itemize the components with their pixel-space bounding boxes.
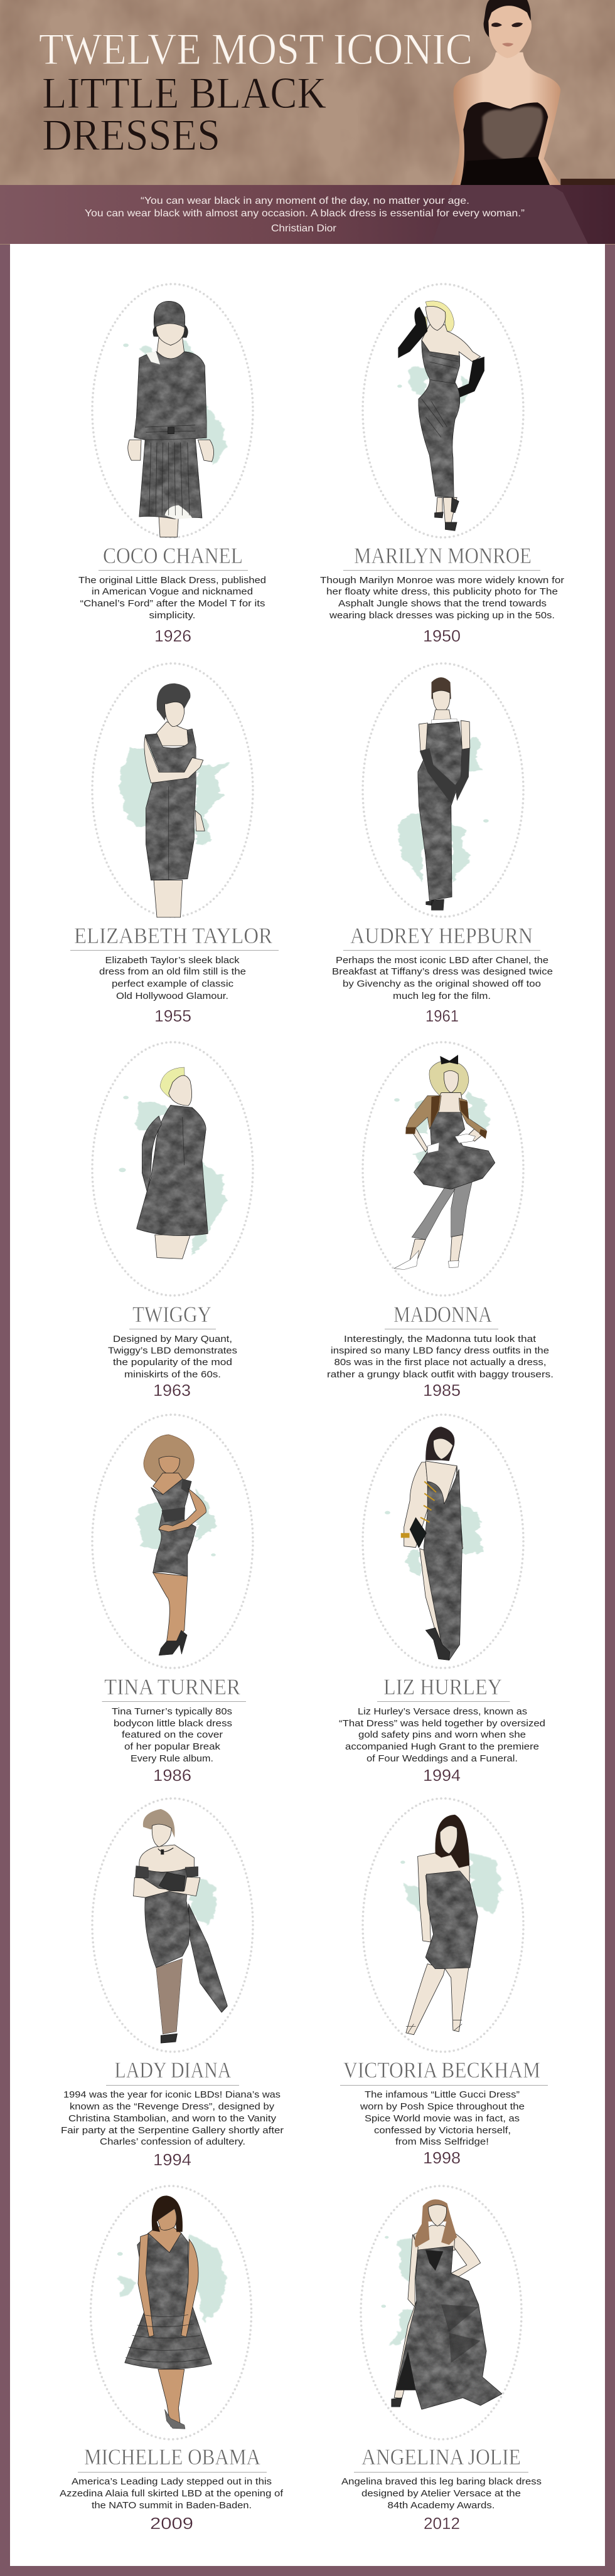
card: Marilyn Monroe <box>320 284 564 645</box>
description <box>112 1706 232 1764</box>
description: Perhaps the most iconic LBD after Chanel, the <box>336 955 548 966</box>
portrait frame <box>92 1042 253 1296</box>
description: 1994 was the year for iconic LBDs! Diana’s was <box>63 2089 281 2100</box>
description: Twiggy’s LBD demonstrates <box>108 1346 237 1356</box>
description: Fair party at the Serpentine Gallery shortly after <box>61 2125 284 2136</box>
description: Breakfast at Tiffany’s dress was designed twice <box>332 966 553 977</box>
card: Twiggy <box>92 1042 253 1400</box>
description: of her popular Break <box>124 1741 221 1752</box>
description: “Chanel’s Ford” after the Model T for its <box>80 598 265 609</box>
year: 1998 <box>423 2148 461 2167</box>
portrait frame <box>363 284 523 537</box>
year: 1994 <box>153 2150 191 2169</box>
portrait frame <box>361 2186 521 2439</box>
description: The original Little Black Dress, published <box>78 575 266 586</box>
description: Christina Stambolian, and worn to the Vanity <box>68 2113 277 2124</box>
description: gold safety pins and worn when she <box>358 1729 526 1740</box>
description: featured on the cover <box>122 1729 223 1740</box>
description: Tina Turner’s typically 80s <box>112 1706 232 1717</box>
figure: Elizabeth Taylor <box>120 684 232 917</box>
portrait frame <box>363 1042 523 1296</box>
name: MICHELLE OBAMA <box>84 2444 260 2469</box>
card: Tina Turner <box>92 1415 253 1785</box>
description: “That Dress” was held together by oversized <box>339 1718 545 1729</box>
description: 84th Academy Awards. <box>388 2500 495 2511</box>
description: perfect example of classic <box>112 978 234 990</box>
description <box>99 955 246 1001</box>
year: 1985 <box>423 1381 461 1400</box>
description: wearing black dresses was picking up in the 50s. <box>329 610 555 621</box>
card: Coco Chanel <box>78 284 266 645</box>
description: the NATO summit in Baden-Baden. <box>92 2500 252 2511</box>
card: Victoria Beckham <box>340 1798 548 2167</box>
figure: Liz Hurley <box>385 1427 484 1660</box>
figure: Marilyn Monroe <box>397 301 484 531</box>
description: Designed by Mary Quant, <box>113 1334 232 1344</box>
description <box>320 575 564 621</box>
description: Charles’ confession of adultery. <box>100 2136 245 2147</box>
description <box>78 575 266 621</box>
description <box>108 1334 237 1380</box>
description <box>61 2089 284 2147</box>
year: 1986 <box>153 1766 191 1785</box>
photo background wall <box>0 0 615 245</box>
figure: Angelina Jolie <box>382 2199 502 2409</box>
portrait frame <box>92 284 253 537</box>
description: simplicity. <box>149 610 196 621</box>
name: MADONNA <box>393 1302 492 1327</box>
description: bodycon little black dress <box>114 1718 232 1729</box>
description: in American Vogue and nicknamed <box>92 586 253 597</box>
description: Asphalt Jungle shows that the trend towards <box>338 598 547 609</box>
description <box>341 2476 542 2511</box>
portrait frame <box>92 663 253 917</box>
year: 1950 <box>423 626 461 645</box>
description: by Givenchy as the original showed off too <box>343 978 541 990</box>
description: America’s Leading Lady stepped out in this <box>72 2476 272 2487</box>
quote band <box>0 185 615 244</box>
title <box>39 25 473 160</box>
name: COCO CHANEL <box>103 543 243 568</box>
quote text <box>85 196 525 234</box>
portrait frame <box>90 2186 251 2439</box>
description: her floaty white dress, this publicity photo for The <box>326 586 558 597</box>
description: designed by Atelier Versace at the <box>361 2488 521 2499</box>
description: Old Hollywood Glamour. <box>116 991 228 1001</box>
description: Every Rule album. <box>131 1753 213 1764</box>
portrait frame <box>363 1415 523 1668</box>
quote text: You can wear black with almost any occasion. A black dress is essential for every woman.” <box>85 208 525 219</box>
title: LITTLE BLACK <box>42 69 326 118</box>
figure: Tina Turner <box>137 1435 218 1655</box>
description: Angelina braved this leg baring black dress <box>341 2476 542 2487</box>
year: 1963 <box>153 1381 191 1400</box>
name: AUDREY HEPBURN <box>350 923 533 948</box>
description: worn by Posh Spice throughout the <box>360 2101 525 2112</box>
figure: Audrey Hepburn <box>399 677 489 910</box>
photo: model in strapless black dress <box>450 0 615 188</box>
portrait frame <box>92 1798 253 2052</box>
description <box>360 2089 525 2147</box>
description: Liz Hurley’s Versace dress, known as <box>358 1706 527 1717</box>
card: Michelle Obama <box>60 2186 284 2533</box>
figure: Coco Chanel <box>123 301 226 537</box>
card: Madonna <box>327 1042 554 1400</box>
description: miniskirts of the 60s. <box>124 1370 221 1380</box>
figure: Victoria Beckham <box>400 1815 500 2035</box>
description <box>327 1334 554 1380</box>
portrait frame <box>363 663 523 917</box>
description: from Miss Selfridge! <box>395 2136 489 2147</box>
card: Angelina Jolie <box>341 2186 542 2533</box>
description: much leg for the film. <box>393 991 491 1001</box>
description: inspired so many LBD fancy dress outfits in the <box>331 1346 549 1356</box>
name: LADY DIANA <box>114 2057 231 2082</box>
name: ELIZABETH TAYLOR <box>74 923 272 948</box>
name: VICTORIA BECKHAM <box>343 2057 540 2082</box>
quote text: “You can wear black in any moment of the day, no matter your age. <box>141 196 469 206</box>
name: TINA TURNER <box>104 1674 240 1699</box>
description: The infamous “Little Gucci Dress” <box>365 2089 520 2100</box>
year: 1926 <box>154 626 191 645</box>
card: Lady Diana <box>61 1798 284 2169</box>
description <box>60 2476 284 2511</box>
description: dress from an old film still is the <box>99 966 246 977</box>
description: confessed by Victoria herself, <box>374 2125 511 2136</box>
year: 1961 <box>425 1006 459 1025</box>
year: 2012 <box>424 2514 460 2533</box>
description <box>332 955 553 1001</box>
card: Elizabeth Taylor <box>70 663 279 1025</box>
description: 80s was in the first place not actually a dress, <box>334 1357 546 1368</box>
header photo panel <box>0 0 615 245</box>
year: 1955 <box>154 1006 191 1025</box>
description: Spice World movie was in fact, as <box>365 2113 520 2124</box>
quote text: Christian Dior <box>271 223 337 234</box>
figure: Madonna <box>394 1055 495 1270</box>
name: MARILYN MONROE <box>354 543 532 568</box>
description: Elizabeth Taylor’s sleek black <box>105 955 240 966</box>
figure: Twiggy <box>119 1067 225 1259</box>
title: DRESSES <box>42 111 220 160</box>
portrait frame <box>92 1415 253 1668</box>
description <box>339 1706 545 1764</box>
description: the popularity of the mod <box>113 1357 232 1368</box>
description: Though Marilyn Monroe was more widely known for <box>320 575 564 586</box>
description: Interestingly, the Madonna tutu look that <box>344 1334 537 1344</box>
name: TWIGGY <box>132 1302 211 1327</box>
name: ANGELINA JOLIE <box>361 2444 521 2469</box>
description: rather a grungy black outfit with baggy trousers. <box>327 1370 554 1380</box>
year: 2009 <box>150 2514 193 2533</box>
figure: Michelle Obama <box>117 2195 227 2429</box>
description: known as the “Revenge Dress”, designed by <box>70 2101 275 2112</box>
figure: Lady Diana <box>133 1809 227 2043</box>
portrait frame <box>363 1798 523 2052</box>
year: 1994 <box>423 1766 461 1785</box>
card: Liz Hurley <box>339 1415 545 1785</box>
card: Audrey Hepburn <box>332 663 553 1025</box>
description: Azzedina Alaia full skirted LBD at the opening of <box>60 2488 284 2499</box>
title: TWELVE MOST ICONIC <box>39 25 473 74</box>
name: LIZ HURLEY <box>383 1674 502 1699</box>
description: accompanied Hugh Grant to the premiere <box>345 1741 539 1752</box>
description: of Four Weddings and a Funeral. <box>366 1753 518 1764</box>
